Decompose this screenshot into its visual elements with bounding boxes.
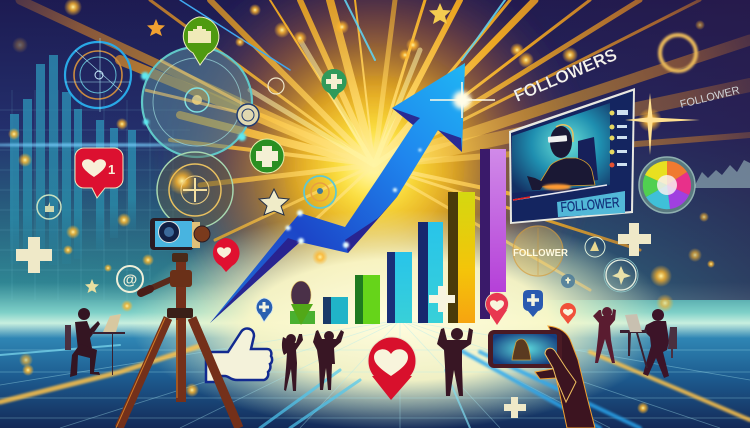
label: FOLLOWER top right: FOLLOWER <box>679 84 741 111</box>
bar: yellow <box>448 192 475 323</box>
left bar chart <box>10 55 136 265</box>
red heart badge: 1 <box>108 162 115 177</box>
hand back <box>535 326 595 428</box>
arrow sparkle highlights <box>286 148 422 248</box>
at-sign ring: @ <box>123 272 137 288</box>
color wheel <box>639 157 695 213</box>
bar: green <box>355 275 380 324</box>
small star ring <box>268 78 284 94</box>
plus: left <box>16 237 52 273</box>
phone <box>488 330 562 368</box>
sparkle star <box>625 93 700 155</box>
bar: purple <box>480 149 506 319</box>
streamer silhouette <box>527 125 595 190</box>
small heart pin <box>560 303 576 324</box>
floor <box>0 320 750 428</box>
blue horizontal light streak <box>0 143 210 147</box>
dancing person <box>593 307 616 363</box>
rings right <box>585 237 638 292</box>
silhouettes of people <box>282 307 677 396</box>
blue pin <box>256 298 273 322</box>
gold ring top right <box>660 35 696 71</box>
small blue pin right <box>561 274 575 288</box>
green plus circle <box>250 139 284 173</box>
red heart pin <box>213 238 240 272</box>
floor light streaks <box>0 345 750 428</box>
plus: floor <box>504 397 526 418</box>
small thumb ring <box>37 195 61 219</box>
bars <box>323 149 506 324</box>
streaming screen <box>509 88 635 224</box>
cream star <box>259 189 289 215</box>
mountain chart <box>695 160 750 188</box>
person at laptop left <box>65 308 125 377</box>
gold star top <box>429 3 451 24</box>
plus: right <box>618 223 651 256</box>
hand holding phone <box>488 326 595 428</box>
red heart badge <box>75 148 123 198</box>
person at laptop right <box>620 309 677 378</box>
thumb over phone <box>545 348 576 402</box>
heading: FOLLOWERS: FOLLOWERS <box>511 44 620 106</box>
plus icons <box>16 223 651 418</box>
ring right of lower circle <box>304 176 336 208</box>
light rays <box>20 0 750 290</box>
arrow shading <box>210 108 462 323</box>
lower gold circle <box>157 152 233 228</box>
arrow tip flare <box>430 82 495 118</box>
green arrow with silhouette <box>290 281 315 325</box>
blue pin right <box>523 290 543 317</box>
left grid <box>0 90 190 300</box>
thumbs up icon <box>206 329 272 382</box>
floor perspective grid <box>0 320 750 428</box>
arrow <box>210 63 495 323</box>
tripod right leg overlapping thumb <box>192 318 239 428</box>
glass circle <box>141 47 252 157</box>
camera body <box>150 218 194 250</box>
plus: bars <box>429 286 455 312</box>
label: FOLLOWER middle: FOLLOWER <box>513 248 569 259</box>
camera on tripod <box>116 218 239 428</box>
follower banner: FOLLOWER <box>560 194 620 215</box>
chat column <box>610 110 628 168</box>
green speech pin <box>183 17 219 65</box>
progress bar <box>513 185 607 200</box>
person arms raised center <box>313 330 344 390</box>
person arms raised right <box>437 328 473 396</box>
orange star <box>147 19 165 36</box>
target ring top left <box>65 38 131 112</box>
small green pin <box>321 69 347 100</box>
heart pin above phone <box>486 292 508 325</box>
chair <box>578 137 598 183</box>
gold compass medallion <box>513 226 563 276</box>
cream glow behind bars <box>130 210 670 428</box>
woman <box>282 334 303 391</box>
at-sign ring <box>117 266 143 292</box>
bar: cyan <box>418 222 443 323</box>
medallion <box>237 104 259 126</box>
big heart pin <box>368 337 416 400</box>
bar: small blue <box>323 297 348 324</box>
tripod legs <box>116 262 239 428</box>
small star left <box>85 279 99 293</box>
bar: teal <box>387 252 412 323</box>
central light burst <box>110 0 640 370</box>
